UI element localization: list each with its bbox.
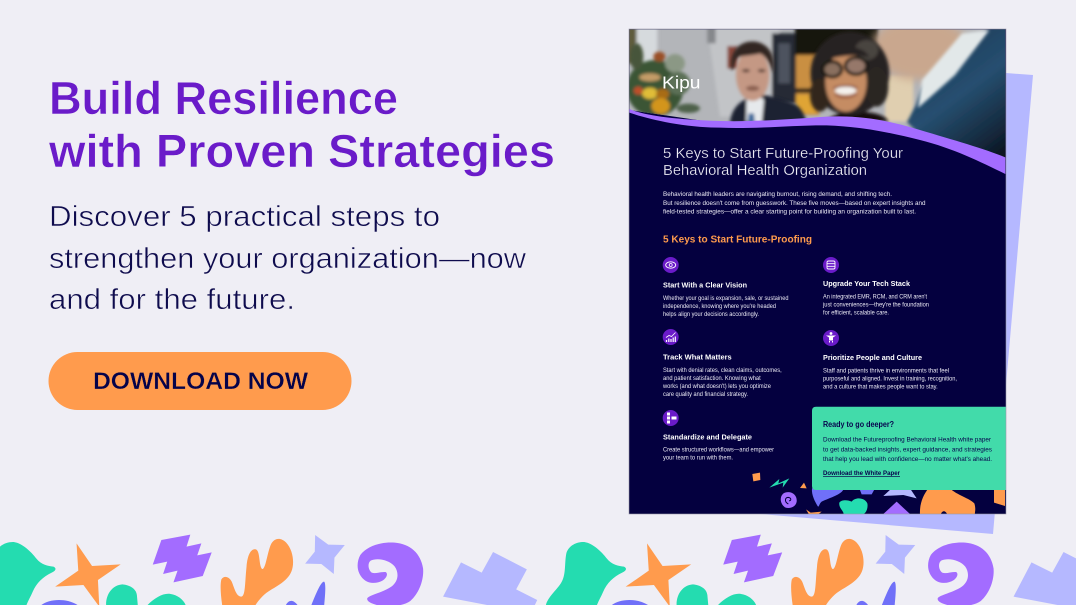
callout: ready to go deeper: that help you lead with confidence—no matter what's ahead. (823, 456, 992, 463)
download button (48, 352, 352, 410)
document intro: field-tested strategies—offer a clear starting point for building an organization built to last. (663, 209, 916, 216)
subheading: Discover 5 practical steps to (49, 201, 440, 233)
callout: ready to go deeper: to get data-backed insights, expert guidance, and strategies (823, 446, 993, 453)
key: start with a clear vision: independence, knowing where you're headed (663, 303, 776, 310)
key: track what matters: care quality and financial strategy. (663, 391, 748, 398)
document bottom shapes (752, 473, 1005, 515)
Kipu logo: Kipu (662, 72, 700, 92)
key: upgrade your tech stack: An integrated EMR, RCM, and CRM aren't (823, 294, 927, 301)
key: track what matters: Start with denial rates, clean claims, outcomes, (663, 367, 782, 374)
callout: ready to go deeper: Download the Futureproofing Behavioral Health white paper (823, 437, 992, 444)
decorative shapes band: right (546, 535, 1076, 605)
headline: with Proven Strategies (48, 125, 555, 177)
decorative shapes band: left (0, 535, 537, 605)
photo header (630, 30, 1006, 160)
foreground background pieces (868, 30, 966, 123)
key: standardize and delegate (663, 410, 775, 462)
icon: person (823, 330, 839, 346)
document title: 5 Keys to Start Future-Proofing Your (663, 145, 903, 162)
lavender sheet behind document (760, 73, 1033, 534)
key: track what matters (662, 329, 782, 398)
document title (663, 145, 903, 179)
headline: Build Resilience (49, 72, 398, 124)
key: prioritize people and culture: and a culture that makes people want to stay. (823, 384, 938, 391)
subheading: and for the future. (49, 284, 295, 316)
section heading: 5 Keys to Start Future-Proofing (663, 234, 812, 245)
key: upgrade your tech stack (822, 257, 929, 317)
key: track what matters: and patient satisfaction. Knowing what (663, 375, 761, 382)
key: prioritize people and culture: purposeful and aligned. Invest in training, recognition, (823, 376, 957, 383)
subheading: strengthen your organization—now (49, 243, 527, 275)
callout: ready to go deeper: Download the White Paper (823, 470, 900, 477)
icon: database (823, 257, 839, 273)
callout: ready to go deeper: Ready to go deeper? (823, 420, 894, 429)
woman (810, 32, 889, 122)
key: track what matters: works (and what doesn't) lets you optimize (662, 383, 771, 390)
icon: chart (663, 329, 679, 345)
callout: ready to go deeper (812, 407, 1006, 490)
subheading (49, 201, 527, 316)
blurred foreground figure (907, 27, 1010, 167)
key: prioritize people and culture (823, 330, 957, 391)
key: track what matters: Track What Matters (663, 353, 732, 362)
document title: Behavioral Health Organization (663, 162, 867, 179)
headline (48, 72, 555, 177)
icon: eye (663, 257, 679, 273)
man (730, 42, 807, 123)
key: start with a clear vision: Whether your goal is expansion, sale, or sustained (663, 295, 789, 302)
key: start with a clear vision (663, 257, 789, 318)
key: standardize and delegate: Create structured workflows—and empower (663, 447, 775, 454)
key: start with a clear vision: helps align your decisions accordingly. (663, 311, 759, 318)
download button: DOWNLOAD NOW (93, 368, 308, 395)
key: prioritize people and culture: Prioritize People and Culture (823, 353, 922, 362)
key: standardize and delegate: Standardize and Delegate (663, 432, 752, 441)
icon: workflow (663, 410, 679, 426)
key: start with a clear vision: Start With a Clear Vision (663, 280, 747, 289)
key: standardize and delegate: your team to run with them. (663, 455, 733, 462)
key: upgrade your tech stack: Upgrade Your Tech Stack (823, 279, 911, 288)
document page (627, 17, 1010, 515)
document intro: Behavioral health leaders are navigating burnout, rising demand, and shifting tech. (663, 191, 892, 198)
key: upgrade your tech stack: for efficient, scalable care. (823, 310, 889, 317)
flowers (627, 43, 700, 117)
wave band (629, 109, 1005, 174)
document intro (663, 191, 926, 216)
key: prioritize people and culture: Staff and patients thrive in environments that feel (823, 368, 949, 375)
key: upgrade your tech stack: just conveniences—they're the foundation (822, 302, 929, 309)
document intro: But resilience doesn't come from guesswork. These five moves—based on expert insights and (663, 200, 926, 207)
